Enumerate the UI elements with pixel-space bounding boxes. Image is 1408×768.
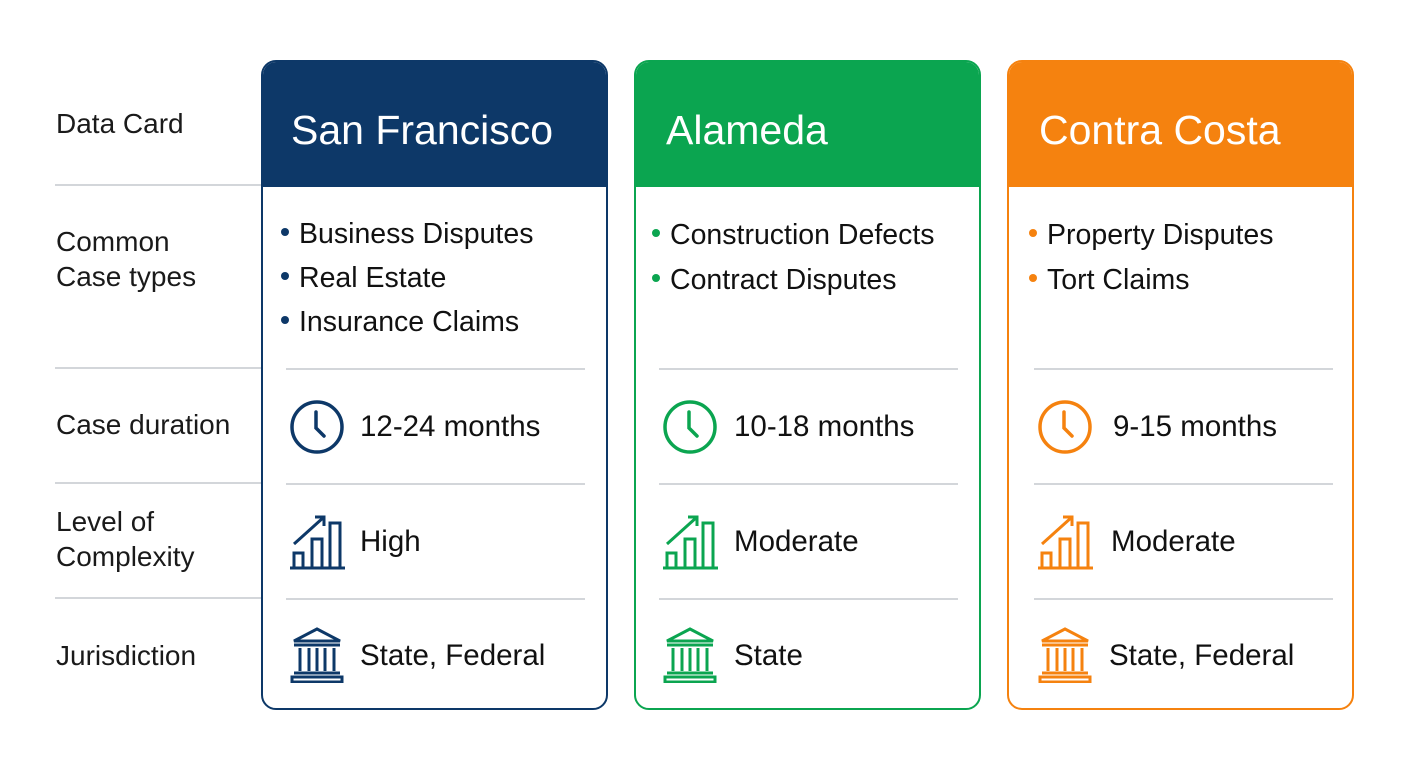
icon: courthouse xyxy=(290,627,344,683)
icon: chart xyxy=(290,516,345,570)
case types list: Property Disputes xyxy=(1047,219,1274,251)
card: San Francisco xyxy=(261,60,608,710)
duration value: 12-24 months xyxy=(360,410,540,443)
icon: clock xyxy=(290,400,344,454)
case types list: Tort Claims xyxy=(1047,264,1190,296)
case types list: Real Estate xyxy=(299,262,446,294)
icon: courthouse xyxy=(1038,627,1092,683)
header: Alameda: Alameda xyxy=(666,107,828,153)
card: Alameda xyxy=(634,60,981,710)
duration value: 9-15 months xyxy=(1113,410,1277,443)
jurisdiction value: State, Federal xyxy=(360,639,545,672)
icon: courthouse xyxy=(664,627,716,683)
header: Contra Costa xyxy=(1009,62,1352,187)
row label: Jurisdiction: Jurisdiction xyxy=(56,640,196,671)
case types list xyxy=(281,218,533,338)
icon: chart xyxy=(1038,516,1093,570)
row label: Level of Complexity: Complexity xyxy=(56,541,194,572)
case types list: Business Disputes xyxy=(299,218,533,250)
header: Contra Costa: Contra Costa xyxy=(1039,107,1281,153)
row label: Common Case types: Case types xyxy=(56,261,196,292)
complexity value: Moderate xyxy=(1111,525,1236,558)
case types list xyxy=(652,219,935,296)
complexity value: High xyxy=(360,525,421,558)
header: San Francisco: San Francisco xyxy=(291,107,553,153)
case types list: Insurance Claims xyxy=(299,306,519,338)
row label: Common Case types xyxy=(56,226,196,292)
duration value: 10-18 months xyxy=(734,410,914,443)
header: Alameda xyxy=(636,62,979,187)
row label: Data Card: Data Card xyxy=(56,108,184,139)
row label: Level of Complexity xyxy=(56,506,194,572)
complexity value: Moderate xyxy=(734,525,859,558)
case types list xyxy=(1029,219,1274,296)
jurisdiction value: State, Federal xyxy=(1109,639,1294,672)
row label: Case duration: Case duration xyxy=(56,409,230,440)
icon: clock xyxy=(663,400,717,454)
card: Contra Costa xyxy=(1007,60,1354,710)
case types list: Contract Disputes xyxy=(670,264,897,296)
row label: Common Case types: Common xyxy=(56,226,170,257)
case types list: Construction Defects xyxy=(670,219,935,251)
icon: chart xyxy=(663,516,718,570)
jurisdiction value: State xyxy=(734,639,803,672)
header: San Francisco xyxy=(263,62,606,187)
row label: Level of Complexity: Level of xyxy=(56,506,154,537)
icon: clock xyxy=(1038,400,1092,454)
